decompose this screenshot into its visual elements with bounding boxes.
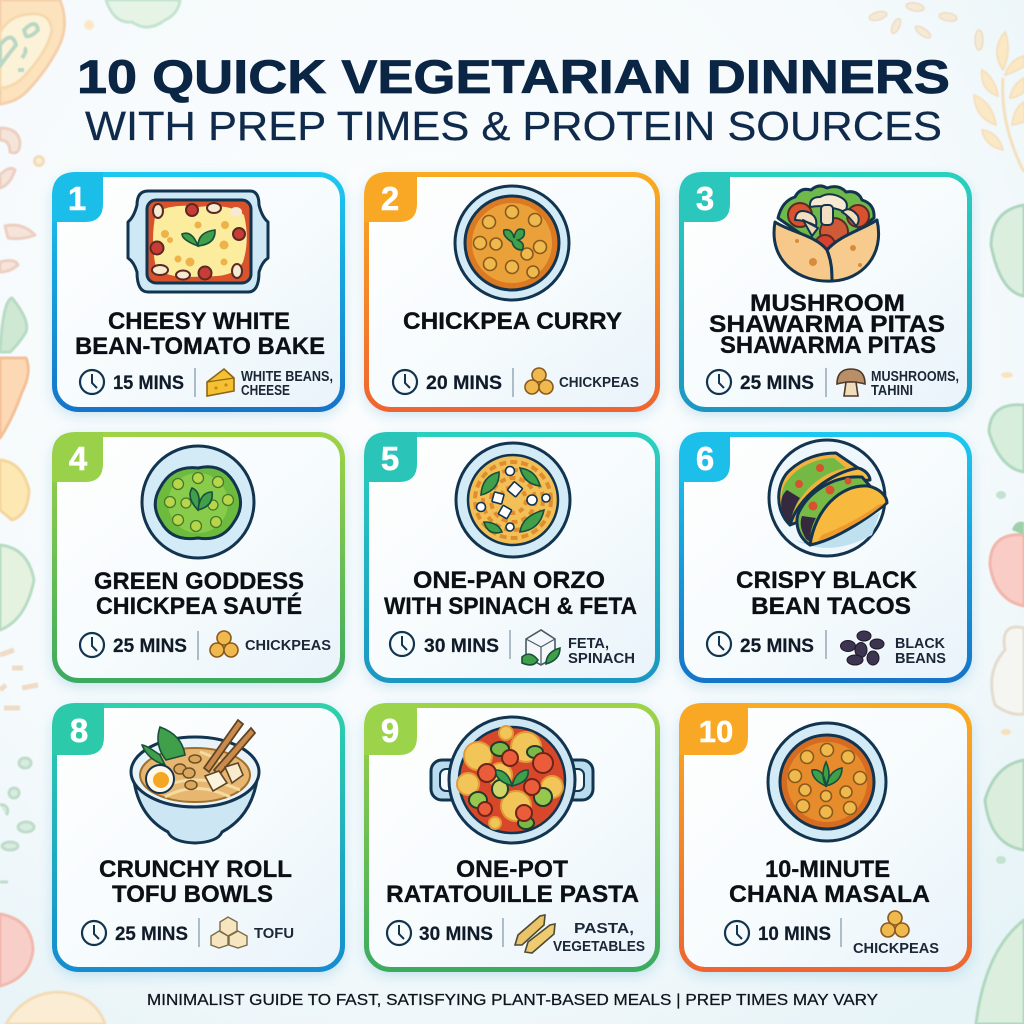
protein: mushroom: TAHINI: [871, 383, 913, 399]
protein: cheese: [207, 369, 333, 399]
number badge: [679, 172, 730, 222]
card 9: one-pot ratatouille pasta: [364, 703, 658, 970]
icon: curry plate: [455, 186, 569, 300]
icon: tacos plate: [769, 440, 887, 556]
dish name: [99, 856, 292, 908]
icon: orzo plate: [456, 443, 570, 557]
dish name: [75, 308, 325, 360]
card frame: [366, 706, 658, 970]
number badge: [52, 432, 103, 482]
protein: cheese: WHITE BEANS,: [241, 369, 333, 385]
footer note: MINIMALIST GUIDE TO FAST, SATISFYING PLANT-BASED MEALS | PREP TIMES MAY VARY: [147, 992, 878, 1009]
icon: green saute plate: [142, 446, 254, 558]
protein: feta and spinach: [522, 630, 635, 667]
divider: [825, 368, 827, 397]
prep time: [82, 921, 188, 945]
card 8: crunchy roll tofu bowls: [52, 703, 342, 970]
card frame: [54, 434, 342, 680]
protein: black beans: BLACK: [895, 636, 946, 652]
number badge: [52, 703, 104, 755]
protein: feta and spinach: FETA,: [568, 636, 609, 652]
number badge: 3: [696, 180, 714, 217]
card frame: [54, 706, 342, 970]
card 10: 10-minute chana masala: [679, 703, 970, 970]
card frame: [54, 174, 342, 410]
dish name: 10-MINUTE: [765, 856, 890, 883]
divider: [197, 631, 199, 660]
subtitle: WITH PREP TIMES & PROTEIN SOURCES: [85, 103, 942, 149]
icon: ratatouille pot: [431, 717, 593, 843]
icon: pita wrap: [774, 186, 879, 281]
divider: [502, 918, 504, 947]
dish name: WITH SPINACH & FETA: [384, 593, 637, 620]
protein: mushroom: MUSHROOMS,: [871, 369, 959, 385]
divider: [198, 918, 200, 947]
protein: cheese: CHEESE: [241, 383, 290, 399]
protein: black beans: BEANS: [895, 651, 946, 667]
protein: tofu: [211, 917, 294, 948]
card frame: [366, 434, 658, 680]
card frame: [366, 174, 658, 410]
dish name: [94, 568, 304, 620]
number badge: 8: [70, 712, 88, 749]
protein: pasta: [515, 915, 645, 955]
number badge: [364, 172, 417, 222]
divider: [512, 368, 514, 397]
prep time: 10 MINS: [758, 924, 831, 945]
protein: black beans: [840, 631, 946, 667]
card 2: chickpea curry: [364, 172, 658, 410]
dish name: [729, 856, 930, 908]
icon: noodle bowl: [131, 720, 259, 843]
dish name: ONE-POT: [456, 856, 568, 883]
dish name: MUSHROOM: [750, 290, 905, 317]
dish name: CHANA MASALA: [729, 881, 930, 908]
protein: chickpeas: [210, 631, 331, 657]
prep time: 30 MINS: [424, 636, 499, 657]
card 6: crispy black bean tacos: [679, 432, 970, 680]
protein: tofu: TOFU: [254, 926, 294, 942]
dish name: TOFU BOWLS: [112, 881, 273, 908]
dish name: CHICKPEA CURRY: [403, 308, 622, 335]
dish name: RATATOUILLE PASTA: [386, 881, 639, 908]
dish name: GREEN GODDESS: [94, 568, 304, 595]
dish name: SHAWARMA PITAS: [720, 332, 936, 359]
number badge: 9: [381, 712, 399, 749]
number badge: 6: [696, 440, 714, 477]
prep time: [390, 632, 499, 657]
front taco: [797, 477, 887, 545]
dish name: [386, 856, 639, 908]
protein: chickpeas: CHICKPEAS: [853, 941, 939, 957]
protein: pasta: PASTA,: [574, 921, 634, 937]
icon: baking dish: [128, 191, 268, 292]
protein: pasta: VEGETABLES: [553, 939, 645, 955]
protein: chickpeas: CHICKPEAS: [559, 375, 639, 391]
prep time: 25 MINS: [740, 636, 814, 657]
dish name: CRUNCHY ROLL: [99, 856, 292, 883]
prep time: [80, 633, 187, 657]
number badge: 5: [381, 440, 399, 477]
dish name: SHAWARMA PITAS: [709, 311, 945, 338]
card frame: [682, 434, 970, 680]
card 5: one-pan orzo: [364, 432, 658, 680]
prep time: 15 MINS: [113, 373, 184, 394]
divider: [825, 630, 827, 659]
prep time: [80, 370, 184, 394]
dish name: ONE-PAN ORZO: [413, 567, 605, 594]
number badge: [679, 432, 730, 482]
dish name: [736, 567, 918, 620]
number badge: [364, 703, 417, 755]
number badge: [679, 703, 748, 755]
prep time: 20 MINS: [426, 373, 502, 394]
dish name: CHEESY WHITE: [108, 308, 290, 335]
number badge: [364, 432, 417, 482]
title: 10 QUICK VEGETARIAN DINNERS: [77, 50, 950, 103]
prep time: [707, 370, 814, 394]
number badge: [52, 172, 103, 222]
prep time: 25 MINS: [115, 924, 188, 945]
card frame: [682, 174, 970, 410]
prep time: [387, 921, 493, 945]
dish name: [384, 567, 637, 620]
protein: chickpeas: [525, 368, 639, 394]
dish name: CRISPY BLACK: [736, 567, 918, 594]
icon: chana masala plate: [768, 723, 886, 841]
divider: [194, 368, 196, 397]
card 4: green goddess chickpea saute: [52, 432, 342, 680]
protein: chickpeas: [853, 911, 939, 957]
prep time: [707, 632, 814, 657]
dish name: [709, 290, 945, 359]
dish name: BEAN TACOS: [751, 593, 911, 620]
number badge: 4: [69, 440, 88, 477]
prep time: 25 MINS: [113, 636, 187, 657]
card 1: cheesy white bean-tomato bake: [52, 172, 342, 410]
protein: chickpeas: CHICKPEAS: [245, 638, 331, 654]
card frame: [682, 706, 970, 970]
prep time: [393, 370, 502, 394]
prep time: [725, 921, 831, 945]
number badge: 10: [699, 714, 733, 749]
card 3: mushroom shawarma pitas: [679, 172, 970, 410]
divider: [509, 630, 511, 659]
prep time: 25 MINS: [740, 373, 814, 394]
protein: mushroom: [837, 369, 959, 399]
prep time: 30 MINS: [419, 924, 493, 945]
protein: feta and spinach: SPINACH: [568, 651, 635, 667]
number badge: 2: [381, 180, 399, 217]
dish name: CHICKPEA SAUTÉ: [96, 592, 302, 620]
number badge: 1: [68, 180, 86, 217]
divider: [840, 918, 842, 947]
dish name: BEAN-TOMATO BAKE: [75, 333, 325, 360]
back taco: [779, 453, 870, 525]
